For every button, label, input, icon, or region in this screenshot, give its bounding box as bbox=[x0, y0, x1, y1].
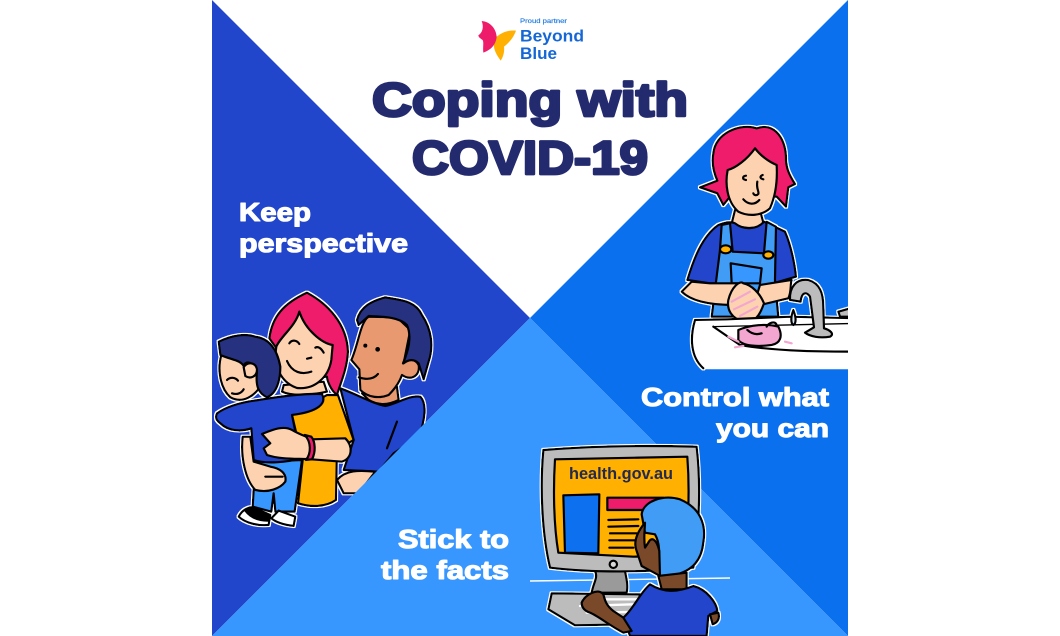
hair bbox=[700, 127, 795, 207]
monitor bbox=[542, 446, 699, 571]
child's head bbox=[219, 343, 262, 400]
power button bbox=[610, 561, 617, 568]
logo: Beyond Blue bbox=[478, 19, 584, 63]
screen heading bar bbox=[607, 498, 663, 510]
child's smile bbox=[227, 378, 238, 381]
woman's neck bbox=[282, 382, 327, 395]
man's body bbox=[340, 388, 425, 472]
man's hair bbox=[357, 297, 431, 379]
woman's eyes bbox=[289, 341, 299, 344]
page margin cover right bbox=[848, 0, 1060, 636]
person's shirt bbox=[623, 584, 717, 636]
screen column bbox=[563, 494, 599, 553]
woman's lower arm supporting child bbox=[242, 437, 286, 491]
child's legs bbox=[253, 460, 302, 512]
child's ear bbox=[244, 363, 257, 377]
woman's hand on child's back bbox=[262, 428, 351, 462]
overalls bbox=[712, 222, 778, 317]
bracelet bbox=[305, 435, 315, 460]
man's smile bbox=[359, 374, 378, 379]
desk line bbox=[530, 578, 730, 581]
panel: keep perspective bbox=[212, 0, 530, 636]
title: Coping with bbox=[372, 73, 688, 126]
heading: keep perspective: Keep bbox=[239, 197, 311, 227]
woman's hair bbox=[269, 293, 348, 395]
panel: stick to the facts bbox=[212, 318, 848, 636]
butterfly icon bbox=[478, 21, 516, 61]
eyes bbox=[743, 176, 746, 180]
screen text: health.gov.au: health.gov.au bbox=[569, 465, 673, 483]
heading: control what you can: Control what bbox=[641, 382, 829, 412]
screen bbox=[554, 457, 689, 557]
sink basin bbox=[692, 317, 860, 368]
illustration: woman washing hands bbox=[682, 127, 860, 368]
title bbox=[372, 73, 688, 184]
overall pocket bbox=[731, 263, 762, 283]
smile bbox=[743, 199, 759, 204]
water drop bbox=[791, 310, 796, 325]
beyond: Beyond bbox=[520, 26, 584, 46]
panel: top white triangle bbox=[212, 0, 848, 318]
overall buttons bbox=[720, 245, 731, 253]
title: COVID-19 bbox=[412, 131, 648, 184]
blue: Blue bbox=[520, 44, 557, 63]
panel: control what you can bbox=[530, 0, 848, 636]
proud partner: Proud partner bbox=[520, 19, 567, 25]
heading: stick to the facts: the facts bbox=[381, 555, 509, 585]
nose bbox=[753, 182, 759, 195]
clasped hands bbox=[728, 282, 764, 322]
man's neck bbox=[362, 387, 399, 404]
keyboard bbox=[548, 593, 640, 625]
face bbox=[727, 148, 777, 215]
person's hair and head bbox=[642, 498, 704, 576]
person's other hand bbox=[710, 613, 719, 624]
second tap knob bbox=[838, 308, 850, 317]
heading: stick to the facts: Stick to bbox=[398, 524, 509, 554]
screen text lines bbox=[608, 519, 638, 548]
heading: control what you can bbox=[641, 382, 829, 443]
person's face and ear bbox=[635, 523, 660, 576]
man's head bbox=[351, 317, 419, 397]
neck bbox=[732, 210, 764, 228]
right arm bbox=[753, 280, 792, 307]
woman's smile bbox=[287, 361, 311, 373]
woman's face bbox=[276, 312, 333, 388]
man's arm fold bbox=[387, 422, 397, 448]
pink soap bbox=[738, 325, 781, 346]
child's shoes bbox=[239, 507, 270, 525]
child's hair bbox=[219, 335, 280, 397]
child's jacket bbox=[216, 394, 323, 462]
tap bbox=[790, 280, 832, 337]
heading: stick to the facts bbox=[381, 524, 509, 585]
left arm bbox=[682, 282, 738, 305]
heading: control what you can: you can bbox=[716, 413, 829, 443]
man's eyes bbox=[364, 344, 367, 347]
monitor stand bbox=[592, 571, 627, 593]
man's hand bbox=[337, 471, 375, 493]
woman's yellow top bbox=[292, 395, 354, 506]
sink inner edge bbox=[713, 327, 860, 352]
illustration: person at computer bbox=[542, 446, 719, 636]
illustration: family hugging bbox=[216, 293, 431, 526]
person's arm and hand bbox=[582, 592, 632, 633]
heading: keep perspective: perspective bbox=[239, 228, 408, 258]
t-shirt bbox=[687, 222, 796, 283]
heading: keep perspective bbox=[239, 197, 408, 258]
